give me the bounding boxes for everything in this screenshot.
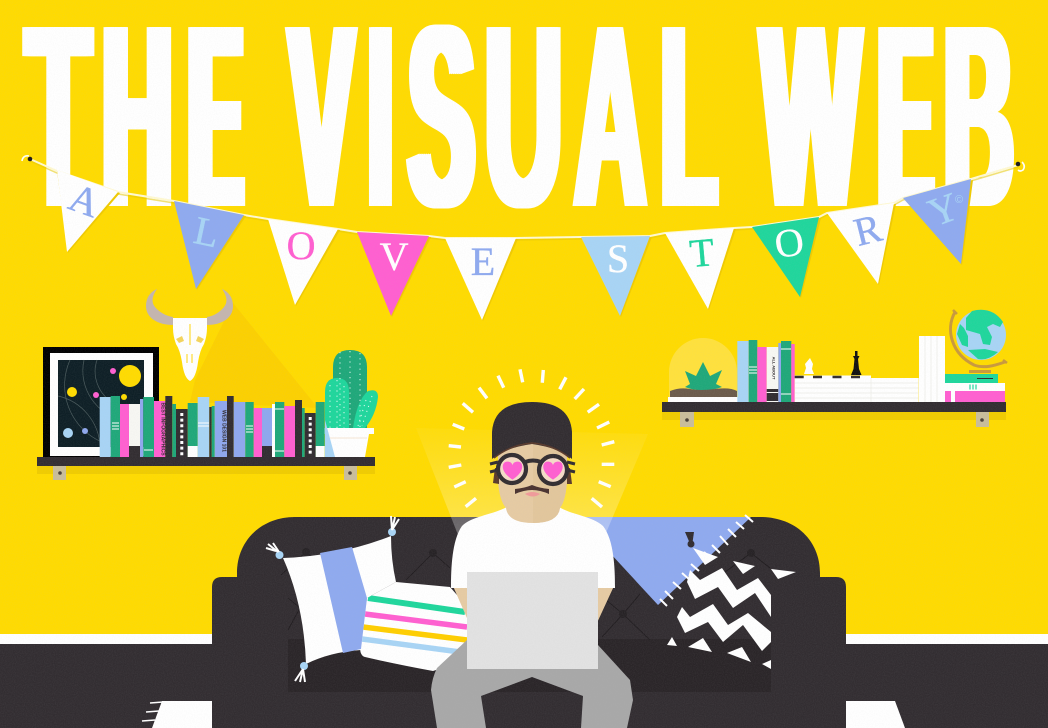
pennant L: [174, 201, 244, 289]
pennant E: E: [471, 239, 495, 284]
legs: [431, 600, 633, 728]
forearms: [453, 586, 614, 625]
sideburns: [493, 468, 572, 484]
chess board and pieces: [795, 351, 919, 402]
pennant O: O: [287, 223, 315, 268]
skull shadow: [190, 303, 318, 408]
pennant Y: [903, 179, 971, 264]
cactus pot: [324, 428, 374, 457]
cactus: [325, 350, 378, 428]
title: [21, 0, 1014, 262]
striped pillow: [360, 582, 470, 671]
wall baseboard: [0, 634, 1048, 645]
stacked tall books: [919, 336, 945, 402]
terrarium: [668, 338, 738, 402]
pennant O: [268, 219, 338, 305]
right shelf: [662, 402, 1006, 427]
pennant S: [581, 236, 650, 316]
t-shirt: [451, 507, 615, 588]
bull skull: [146, 289, 233, 381]
heart glasses: [490, 455, 575, 484]
left pin: [22, 156, 32, 161]
radiating love lines: [449, 369, 614, 507]
bunting string: [30, 159, 1018, 240]
left shelf: [37, 457, 375, 480]
pennant T: T: [688, 229, 716, 276]
pennant E: [445, 238, 516, 320]
blue striped pillow: [266, 516, 399, 682]
face: [498, 438, 567, 523]
planets poster: [43, 347, 159, 457]
laptop light beam: [416, 428, 648, 540]
right rug: [846, 701, 905, 728]
pennant Y: Y: [922, 183, 965, 235]
moustache: [515, 485, 549, 494]
pennant shadows: [57, 171, 973, 321]
beanie: [492, 402, 572, 459]
right pin: [1016, 162, 1024, 171]
left shelf books: WEB DESIGN 101: [221, 410, 227, 452]
pennant R: R: [849, 205, 886, 255]
pennant O: O: [772, 218, 807, 267]
pennant T: [665, 228, 734, 309]
pennant A: [57, 170, 118, 252]
pennant O: [752, 217, 819, 297]
mouth: [525, 492, 540, 496]
pennant L: L: [190, 207, 223, 256]
person: [431, 402, 633, 728]
blue back cushion: [585, 515, 753, 606]
right shelf books: ALL ABOUT: [772, 357, 776, 380]
left rug: [142, 701, 212, 728]
pennant V: V: [380, 234, 409, 279]
stacked flat books: [945, 374, 1005, 402]
laptop: [467, 572, 598, 669]
globe: [951, 310, 1007, 373]
floor: [0, 644, 1048, 728]
left shelf books: BEST INFOGRAPHICS: [160, 402, 166, 456]
pennant S: S: [607, 236, 629, 281]
pennant A: A: [63, 174, 106, 226]
pennant V: [357, 232, 429, 316]
right shelf books: [737, 340, 795, 402]
left shelf books: [100, 396, 335, 457]
zigzag cushion: [667, 532, 796, 669]
pennant Y: ©: [955, 194, 963, 206]
sofa: [212, 517, 846, 728]
pennant R: [827, 203, 894, 284]
